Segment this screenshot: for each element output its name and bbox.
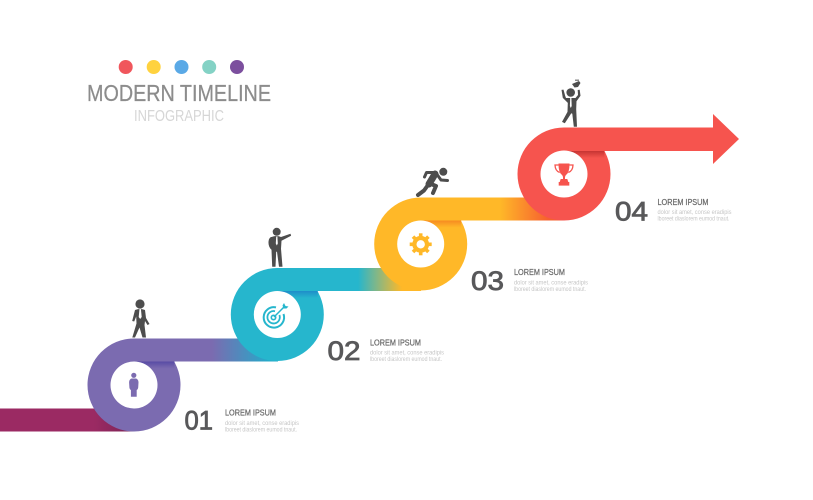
figure: pointing man [268, 228, 291, 267]
icon: gear [410, 233, 432, 255]
body line 2: lboreet diaslorem eumod tnaut. [658, 216, 730, 222]
figure: walking man [132, 299, 150, 338]
band: step 3 to 4 [420, 198, 564, 220]
heading: LOREM IPSUM [370, 338, 421, 348]
icon: person [129, 373, 138, 397]
body line 2: lboreet diaslorem eumod tnaut. [370, 357, 442, 363]
figure: running man [418, 168, 448, 195]
body: dolor sit amet, conse eradipis [514, 280, 588, 286]
title block [87, 60, 271, 125]
body: dolor sit amet, conse eradipis [658, 210, 732, 216]
body: dolor sit amet, conse eradipis [370, 350, 444, 356]
body: dolor sit amet, conse eradipis [225, 421, 299, 427]
label: step 01 [184, 406, 299, 436]
figure: man raising trophy [562, 80, 580, 127]
subheading: INFOGRAPHIC [134, 108, 224, 125]
ring: step 2 [231, 268, 358, 361]
number: 03 [471, 266, 504, 296]
heading: LOREM IPSUM [514, 267, 565, 277]
label: step 03 [471, 266, 588, 296]
number: 01 [184, 406, 213, 436]
band: step 2 to 3 [277, 268, 421, 291]
ring: step 1 [88, 338, 212, 432]
heading: LOREM IPSUM [225, 408, 276, 418]
icon: target [264, 303, 288, 328]
label: step 02 [328, 336, 444, 366]
ring: step 3 [374, 198, 500, 290]
body line 2: lboreet diaslorem eumod tnaut. [514, 287, 586, 293]
label: step 04 [615, 196, 732, 226]
body line 2: lboreet diaslorem eumod tnaut. [225, 428, 297, 434]
icon: trophy [555, 164, 573, 186]
heading: MODERN TIMELINE [87, 80, 271, 106]
number: 02 [328, 336, 360, 366]
band: step 1 to 2 [134, 338, 278, 362]
heading: LOREM IPSUM [658, 197, 708, 207]
ring: step 4 with arrow [518, 114, 739, 220]
lead-in band [0, 408, 134, 432]
number: 04 [615, 196, 648, 226]
colour dots [119, 60, 244, 74]
ribbon timeline [0, 114, 739, 432]
